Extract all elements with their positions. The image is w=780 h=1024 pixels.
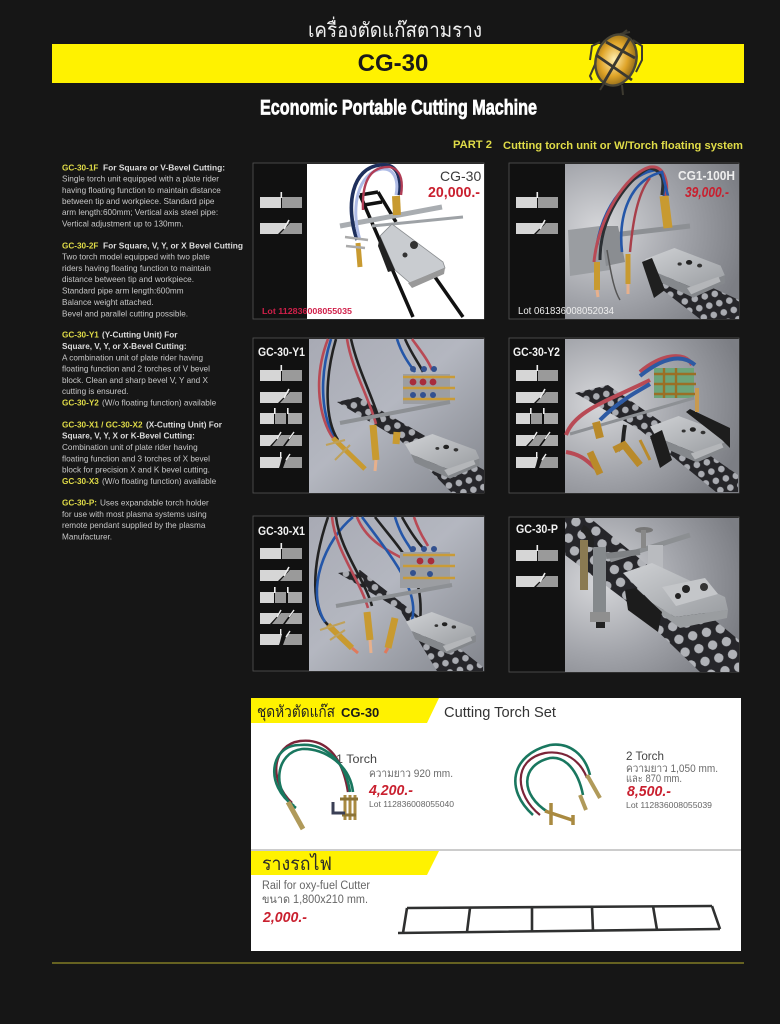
model label: GC-30-Y2	[513, 347, 560, 359]
model label: GC-30-P	[516, 524, 558, 536]
lot number: Lot 112836008055035	[262, 306, 352, 316]
hoses	[566, 356, 695, 470]
text block: model descriptions: Square, V, Y, or X-Bevel Cutting:	[62, 342, 187, 351]
panel: GC-30-X1	[253, 516, 484, 671]
torch block	[400, 546, 455, 588]
text: 1 torch	[336, 754, 454, 809]
text block: model descriptions: (X-Cutting Unit) For	[146, 420, 223, 430]
rail	[338, 570, 483, 671]
yellow tab: torch set	[251, 698, 439, 723]
knob column	[635, 527, 663, 577]
arm	[340, 402, 450, 423]
text block: model descriptions: Square, V, Y, X or K-Bevel Cutting:	[62, 432, 195, 440]
model label: CG1-100H	[678, 168, 735, 183]
panel: CG-30	[253, 163, 484, 319]
bevel icons	[516, 192, 558, 234]
subtitle: Economic Portable Cutting Machine	[260, 96, 537, 120]
torch block	[654, 368, 696, 398]
yellow tab: torch set: CG-30	[341, 705, 379, 720]
panel: CG1-100H	[509, 163, 739, 319]
text block: model descriptions: Two torch model equipped with two plate	[62, 252, 210, 262]
text block: model descriptions: for use with most plasma systems using	[62, 510, 207, 519]
image: rail ladder	[398, 906, 720, 933]
text block: model descriptions: Balance weight attached.	[62, 298, 154, 307]
text block: model descriptions: Manufacturer.	[62, 532, 112, 542]
hoses	[319, 339, 432, 440]
text block: model descriptions: between tip and workpiece. Standard pipe	[62, 197, 215, 206]
rail	[337, 397, 484, 493]
text block: model descriptions: For Square or V-Bevel Cutting:	[103, 164, 225, 172]
text: 2 torch: 8,500.-	[627, 783, 671, 800]
text block: model descriptions: floating function and 2 torches of V bevel	[62, 364, 210, 374]
footer line	[52, 962, 744, 964]
part heading: PART 2	[453, 139, 492, 151]
text block: model descriptions: having floating function to maintain distance	[62, 186, 221, 195]
text block: model descriptions: remote pendant supplied by the plasma	[62, 521, 206, 530]
text: 2 torch: ความยาว 1,050 mm.	[626, 763, 718, 775]
text block: model descriptions	[62, 164, 243, 542]
model label: GC-30-X1	[258, 526, 306, 538]
text block: model descriptions: Single torch unit equipped with a plate rider	[62, 175, 219, 184]
text block: model descriptions: GC-30-P:	[62, 498, 97, 508]
torches	[320, 612, 395, 653]
text block: model descriptions: cutting is ensured.	[62, 387, 128, 396]
text block: model descriptions: (W/o floating function) available	[102, 398, 217, 408]
part heading: Cutting torch unit or W/Torch floating system	[503, 140, 743, 152]
yellow model banner: CG-30	[358, 50, 428, 77]
rail	[655, 272, 739, 319]
rail	[565, 518, 739, 672]
panel: GC-30-P	[509, 517, 739, 672]
panel: GC-30-Y1	[253, 338, 484, 493]
text block: model descriptions: For Square, V, Y, or X Bevel Cutting	[103, 242, 243, 250]
machine body	[378, 224, 445, 288]
text: 1 torch: Lot 112836008055040	[369, 799, 454, 809]
text: 1 torch: 4,200.-	[368, 782, 413, 799]
text block: model descriptions: GC-30-Y2	[62, 398, 99, 408]
text block: model descriptions: Combination unit of plate rider having	[62, 443, 198, 452]
text block: model descriptions: block. Clean and sharp bevel V, Y and X	[62, 376, 209, 385]
text block: model descriptions: (W/o floating function) available	[102, 477, 217, 486]
text block: model descriptions: floating function and 3 torches of X bevel	[62, 454, 210, 464]
text: 2 torch: และ 870 mm.	[626, 773, 682, 785]
text block: model descriptions: distance between tip and workpiece.	[62, 275, 194, 284]
text: 1 torch: 1 Torch	[336, 754, 377, 766]
text block: model descriptions: riders having floating function to maintain	[62, 264, 211, 273]
text: rail details: ขนาด 1,800x210 mm.	[262, 894, 368, 906]
machine body	[405, 434, 479, 479]
machine body	[650, 416, 728, 462]
text: 2 torch	[626, 751, 718, 810]
text block: model descriptions: GC-30-2F	[62, 242, 98, 250]
model label: CG-30	[440, 168, 481, 184]
arm	[336, 585, 452, 606]
text block: model descriptions: GC-30-1F	[62, 164, 98, 172]
side box	[625, 588, 662, 632]
machine body	[623, 563, 728, 628]
bevel icons	[516, 365, 558, 468]
text block: model descriptions: Vertical adjustment up to 130mm.	[62, 220, 184, 228]
text: 2 torch: 2 Torch	[626, 751, 664, 763]
arm and back assembly	[568, 226, 690, 276]
torch column	[580, 528, 610, 628]
text: rail details: Rail for oxy-fuel Cutter	[262, 880, 370, 892]
rail	[575, 385, 738, 492]
bevel icons	[260, 543, 302, 645]
text: 1 torch: ความยาว 920 mm.	[369, 768, 453, 780]
icon: golden beetle logo	[589, 29, 643, 95]
text block: model descriptions: Standard pipe arm length:600mm	[62, 286, 184, 296]
hoses	[315, 517, 428, 625]
torches	[590, 422, 650, 474]
machine body	[406, 612, 476, 654]
divider	[251, 849, 741, 851]
panel: GC-30-Y2	[509, 338, 739, 493]
torch block	[403, 366, 455, 404]
image: two torches with hoses	[515, 745, 600, 825]
text block: model descriptions: GC-30-X1 / GC-30-X2	[62, 420, 143, 430]
text: rail details	[262, 880, 370, 926]
machine body	[645, 248, 725, 298]
yellow tab: rail: รางรถไฟ	[262, 853, 332, 875]
title: Thai heading: เครื่องตัดแก๊สตามราง	[308, 16, 482, 42]
arm	[570, 398, 694, 434]
bevel icons	[260, 192, 302, 234]
arm	[606, 535, 690, 560]
lot number: Lot 061836008052034	[518, 306, 614, 317]
side box	[642, 258, 665, 298]
yellow tab: rail	[251, 851, 439, 875]
side boxes	[650, 409, 730, 468]
text block: model descriptions: block for precision X and K bevel cutting.	[62, 466, 210, 474]
model label: GC-30-Y1	[258, 347, 306, 359]
text: rail details: 2,000.-	[262, 909, 307, 926]
heading: cutting torch set: Cutting Torch Set	[444, 704, 557, 721]
yellow tab: torch set: ชุดหัวตัดแก๊ส	[257, 702, 335, 722]
price: 39,000.-	[685, 184, 729, 201]
text block: model descriptions: arm length:600mm; Vertical axis steel pipe:	[62, 208, 218, 217]
machine photo: rail, arms, hoses	[340, 165, 463, 317]
text block: model descriptions: GC-30-X3	[62, 477, 99, 486]
text block: model descriptions: Bevel and parallel cutting possible.	[62, 310, 188, 318]
panel: accessories	[251, 698, 741, 951]
text block: model descriptions: A combination unit of plate rider having	[62, 354, 204, 362]
torches	[326, 425, 397, 471]
text: 2 torch: Lot 112836008055039	[626, 800, 712, 810]
text block: model descriptions: GC-30-Y1	[62, 330, 99, 340]
text block: model descriptions: Uses expandable torch holder	[100, 498, 209, 508]
image: single torch with hoses	[274, 741, 358, 829]
price: 20,000.-	[428, 184, 480, 201]
text block: model descriptions: (Y-Cutting Unit) For	[102, 330, 178, 340]
bevel icons	[260, 365, 302, 468]
hoses and torches	[594, 167, 668, 300]
bevel icons	[516, 545, 558, 587]
yellow model banner	[52, 44, 744, 83]
